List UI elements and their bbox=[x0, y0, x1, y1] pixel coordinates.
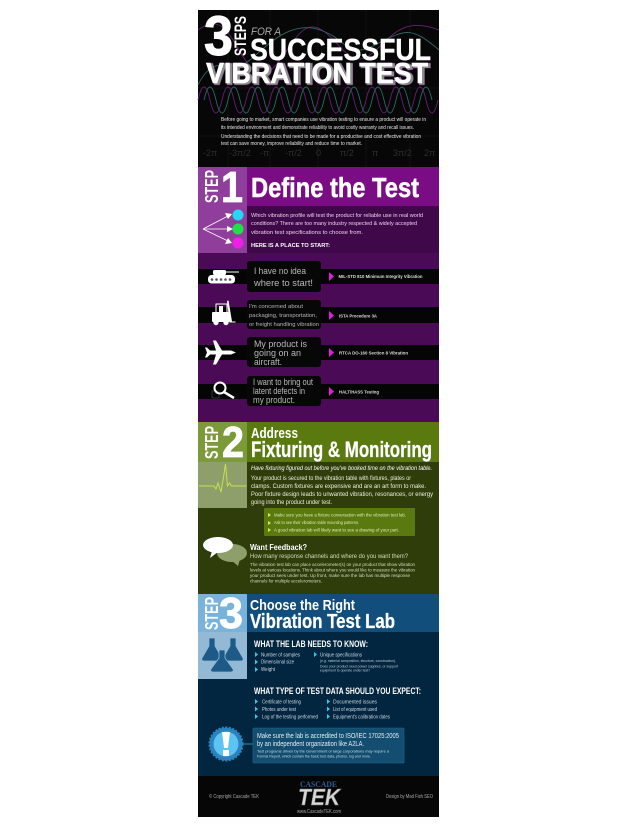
heading: Define the Test: Define the Test bbox=[251, 172, 419, 203]
icon: lab flasks bbox=[202, 638, 243, 672]
callout: accreditation: Formal Report, which contain the basic test data, photos, log and more. bbox=[257, 754, 371, 758]
heading: what type of test data: WHAT TYPE OF TEST DATA SHOULD YOU EXPECT: bbox=[254, 686, 421, 696]
bubble: aircraft bbox=[247, 337, 321, 368]
chart: pi axis labels: 2π bbox=[424, 148, 435, 158]
list: lab needs: equipment to operate under test? bbox=[320, 668, 370, 672]
list: test data: Log of the testing performed bbox=[262, 714, 318, 720]
panel: footer bbox=[198, 776, 439, 817]
logo: Cascade TEK: TEK bbox=[298, 784, 341, 810]
arrow: row 3 bbox=[329, 348, 334, 357]
list: lab needs: Unique specifications bbox=[320, 652, 362, 658]
callout: accreditation: Make sure the lab is accredited to ISO/IEC 17025:2005 bbox=[257, 733, 399, 740]
text: step 1 intro: Which vibration profile will test the product for reliable use in real world bbox=[251, 213, 423, 219]
chart: pi axis labels: -3π/2 bbox=[229, 148, 251, 158]
icon: alert seal bbox=[210, 728, 254, 760]
text: feedback body: channels for multiple accelerometers. bbox=[250, 578, 322, 584]
icon: forklift bbox=[212, 300, 236, 325]
title: numeral 3: 3 bbox=[204, 4, 233, 67]
icon: magnifier bbox=[212, 382, 234, 398]
callout: fixture checklist: A good vibration lab will likely want to see a drawing of your part. bbox=[274, 528, 399, 532]
heading: step 1 badge: STEP bbox=[202, 170, 222, 203]
chart: pi axis labels: -2π bbox=[203, 148, 217, 158]
chart: pi axis labels: -π bbox=[260, 148, 269, 158]
heading: step 1 badge: 1 bbox=[221, 163, 243, 212]
text: step 2 body: clamps. Custom fixtures are expensive and are an art form to make. bbox=[251, 483, 426, 490]
text: introduction: test can save money, improve reliability and reduce time to market. bbox=[221, 141, 362, 147]
title: SUCCESSFUL: SUCCESSFUL bbox=[250, 32, 431, 67]
arrow: row 2 bbox=[329, 311, 334, 320]
title: STEPS: STEPS bbox=[231, 16, 250, 56]
text: introduction: its intended environment and demonstrate reliability to avoid costly warranty and recall issues. bbox=[221, 125, 414, 131]
list: lab needs: Weight bbox=[261, 667, 276, 673]
text: website: www.CascadeTEK.com bbox=[297, 809, 341, 815]
text: feedback body bbox=[250, 562, 415, 584]
text: feedback body: levels at various locations. Think about where you would like to measure the vibration bbox=[250, 568, 415, 574]
heading: step 3 badge bbox=[202, 589, 243, 638]
text: here is a place to start: HERE IS A PLACE TO START: bbox=[251, 243, 330, 249]
title: VIBRATION TEST: VIBRATION TEST bbox=[206, 58, 428, 90]
chart: pi axis labels: π/2 bbox=[340, 148, 354, 158]
list: test data: Documented issues bbox=[333, 700, 377, 706]
heading: step 2 badge: 2 bbox=[222, 418, 244, 467]
label: RTCA: RTCA DO-160 Section 8 Vibration bbox=[339, 350, 408, 356]
chart: pi axis labels: -π/2 bbox=[285, 148, 302, 158]
text: step 1 intro bbox=[251, 213, 423, 236]
bubble: packaging: or freight handling vibration bbox=[249, 322, 319, 328]
chart: pi axis labels: π bbox=[372, 148, 378, 158]
bubble: no idea: I have no idea bbox=[254, 266, 307, 277]
icon: three option arrows bbox=[203, 210, 244, 248]
list: test data bbox=[255, 699, 390, 720]
chart: background sine waves bbox=[198, 24, 439, 113]
callout: accreditation bbox=[253, 728, 404, 763]
bubble: latent defects: latent defects in bbox=[253, 385, 305, 396]
callout: fixture checklist: Ask to see their vibration table mounting patterns. bbox=[274, 520, 359, 525]
logo: Cascade TEK: CASCADE bbox=[300, 779, 337, 789]
title: VIBRATION TEST: VIBRATION TEST bbox=[208, 59, 430, 91]
bubble: aircraft: My product is bbox=[254, 339, 307, 350]
list: test data: List of equipment used bbox=[333, 707, 377, 713]
list: lab needs: Number of samples bbox=[261, 652, 300, 658]
chart: pi axis labels: 0 bbox=[316, 148, 321, 158]
label: MIL-STD: MIL-STD 810 Minimum Integrity Vibration bbox=[338, 274, 423, 279]
arrow: row 1 bbox=[329, 272, 334, 281]
list: test data: Photos under test bbox=[262, 707, 297, 713]
bubble: latent defects bbox=[247, 376, 321, 406]
bubble: no idea: where to start! bbox=[253, 278, 313, 289]
text: step 2 body: Your product is secured to the vibration table with fixtures, plates or bbox=[251, 475, 412, 482]
label: ISTA: ISTA Procedure 3A bbox=[339, 314, 378, 318]
heading: Vibration Test Lab: Vibration Test Lab bbox=[250, 611, 395, 633]
heading: what the lab needs to know: WHAT THE LAB NEEDS TO KNOW: bbox=[254, 639, 368, 649]
text: feedback body: The vibration test lab can place accelerometer(s) on your product that show vibration bbox=[250, 562, 415, 568]
heading: Choose the Right: Choose the Right bbox=[250, 597, 355, 614]
list: lab needs: Dimensional size bbox=[261, 660, 294, 666]
text: introduction bbox=[221, 117, 426, 147]
heading: step 1 badge bbox=[202, 163, 243, 212]
panel: step 3 bbox=[198, 589, 439, 776]
row: no idea bbox=[198, 261, 439, 292]
bubble: latent defects: I want to bring out bbox=[253, 376, 313, 387]
bubble: aircraft: going on an bbox=[254, 348, 301, 359]
row: aircraft bbox=[198, 337, 439, 368]
row: latent defects bbox=[198, 376, 439, 406]
icon: airplane bbox=[205, 340, 236, 364]
text: introduction: Understanding the decisions that need to be made for a productive and cost effective vibration bbox=[221, 134, 421, 140]
panel: header bbox=[198, 4, 439, 167]
icon: heartbeat bbox=[199, 464, 246, 492]
list: lab needs bbox=[255, 652, 399, 673]
text: step 2 body bbox=[251, 475, 434, 506]
heading: step 2 badge bbox=[202, 418, 244, 467]
text: step 1 intro: vibration test specifications to choose from. bbox=[251, 230, 363, 236]
list: lab needs: Does your product need power supplies, or support bbox=[320, 664, 399, 668]
icon: tank bbox=[208, 270, 239, 284]
title: FOR A: FOR A bbox=[251, 26, 281, 38]
list: lab needs: (e.g. material composition, structure, construction). bbox=[320, 659, 396, 663]
heading: step 3 badge: 3 bbox=[219, 589, 243, 638]
bubble: packaging: packaging, transportation, bbox=[249, 313, 317, 319]
bubble: packaging bbox=[247, 300, 321, 329]
panel: step 2 bbox=[198, 418, 439, 594]
text: step 1 intro: conditions? There are too many industry respected & widely accepted bbox=[251, 221, 417, 227]
label: HALT: HALT/HASS Testing bbox=[339, 390, 379, 394]
heading: Fixturing & Monitoring: Fixturing & Monitoring bbox=[251, 437, 432, 462]
text: italic lead: Have fixturing figured out before you've booked time on the vibration table. bbox=[251, 465, 432, 472]
callout: fixture checklist: Make sure you have a fixture conversation with the vibration test lab. bbox=[274, 512, 406, 518]
callout: accreditation: by an independent organization like A2LA. bbox=[257, 741, 364, 748]
bubble: latent defects: my product. bbox=[253, 394, 295, 405]
icon: speech bubbles bbox=[203, 537, 247, 566]
chart: pi axis labels bbox=[203, 148, 435, 158]
heading: Want Feedback: Want Feedback? bbox=[250, 543, 307, 552]
text: step 2 body: going into the product under test. bbox=[251, 499, 332, 506]
bubble: aircraft: aircraft. bbox=[254, 357, 282, 368]
bubble: packaging: I'm concerned about bbox=[249, 304, 303, 310]
list: test data: Equipment's calibration dates bbox=[333, 714, 390, 720]
list: test data: Certificate of testing bbox=[262, 700, 301, 706]
title: VIBRATION TEST: VIBRATION TEST bbox=[208, 59, 430, 91]
text: feedback question: How many response channels and where do you want them? bbox=[250, 554, 409, 560]
bubble: no idea bbox=[247, 261, 321, 292]
text: step 2 body: Poor fixture design leads to unwanted vibration, resonances, or energy bbox=[251, 491, 434, 498]
chart: pi axis labels: 3π/2 bbox=[393, 148, 412, 158]
heading: step 3 badge: STEP bbox=[202, 597, 222, 630]
text: feedback body: your product sees under test. Up front, make sure the lab has multiple response bbox=[250, 573, 410, 579]
heading: step 2 badge: STEP bbox=[202, 426, 222, 459]
text: design credit: Design by Mad Fish SEO bbox=[386, 794, 433, 800]
arrow: row 4 bbox=[329, 387, 334, 396]
text: copyright: © Copyright Cascade TEK bbox=[209, 793, 260, 800]
panel: step 1 bbox=[198, 163, 439, 422]
callout: fixture checklist bbox=[264, 508, 415, 536]
row: packaging bbox=[198, 300, 439, 329]
callout: accreditation: Test programs driven by the Government or large corporations may require a bbox=[257, 748, 390, 754]
heading: Address: Address bbox=[251, 425, 298, 442]
text: introduction: Before going to market, smart companies use vibration testing to ensure a product will operate in bbox=[221, 117, 426, 123]
